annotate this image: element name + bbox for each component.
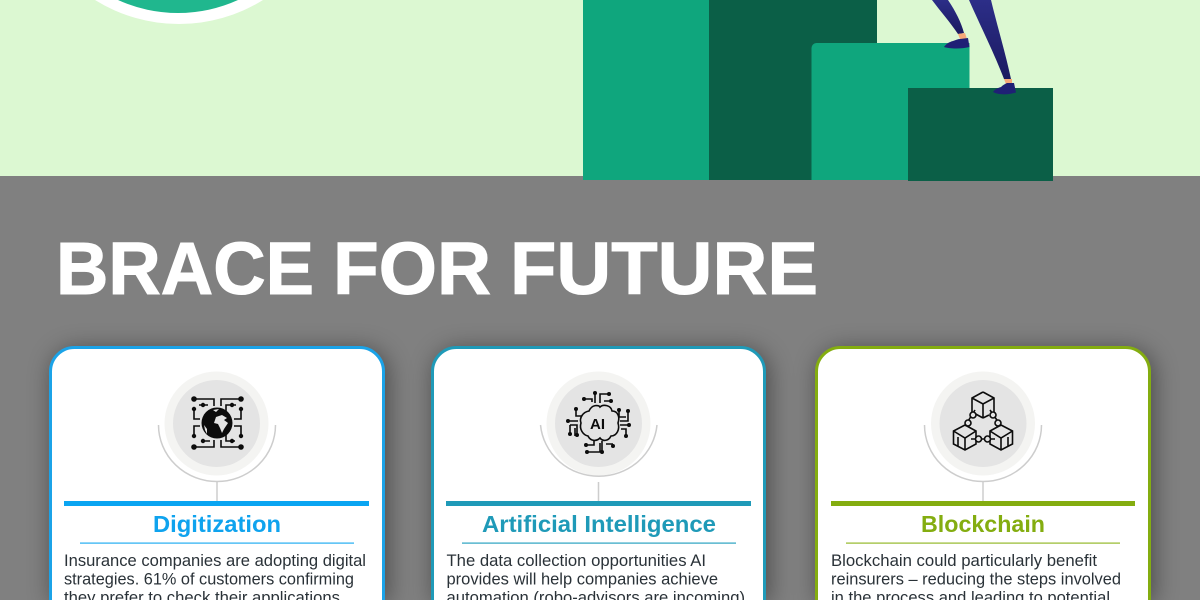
card frame <box>50 348 384 600</box>
card frame <box>432 348 764 600</box>
body text <box>64 551 366 600</box>
title: FOR <box>333 227 491 310</box>
icon: AI brain with circuit lines <box>566 391 631 454</box>
body text <box>446 551 745 600</box>
accent bar <box>64 501 369 506</box>
title: BRACE <box>56 227 314 310</box>
heading underline <box>462 542 736 544</box>
body text: Blockchain could particularly benefit <box>831 551 1097 570</box>
heading: Digitization <box>153 511 281 537</box>
heading underline <box>80 542 354 544</box>
badge: green disc <box>118 0 238 13</box>
heading: Artificial Intelligence <box>482 511 716 537</box>
icon medallion <box>924 372 1042 505</box>
body text: strategies. 61% of customers confirming <box>64 570 354 588</box>
body text <box>831 551 1121 600</box>
heading: Blockchain <box>921 511 1045 537</box>
icon: three linked blockchain cubes <box>954 392 1012 450</box>
accent bar <box>831 501 1135 506</box>
panel: artificial intelligence <box>432 348 764 600</box>
illustration: person's legs climbing steps <box>932 0 1016 94</box>
icon medallion <box>158 372 276 505</box>
accent bar <box>446 501 751 506</box>
card frame <box>816 348 1150 600</box>
body text: provides will help companies achieve <box>446 570 718 588</box>
icon: AI brain with circuit lines: AI <box>590 416 605 433</box>
body text: Insurance companies are adopting digital <box>64 551 366 570</box>
title: FUTURE <box>510 227 818 310</box>
illustration: green stair blocks <box>583 0 1053 181</box>
panel: digitization <box>50 348 384 600</box>
badge: cropped green circle with white ring <box>95 0 263 24</box>
icon medallion <box>540 372 657 505</box>
body text: reinsurers – reducing the steps involved <box>831 570 1121 588</box>
icon: globe with circuit lines <box>191 396 244 450</box>
panel: blockchain <box>816 348 1150 600</box>
body text: The data collection opportunities AI <box>446 551 706 570</box>
heading underline <box>846 542 1120 544</box>
background: top light green band <box>0 0 1200 176</box>
title <box>56 227 818 310</box>
background: grey lower section <box>0 176 1200 600</box>
